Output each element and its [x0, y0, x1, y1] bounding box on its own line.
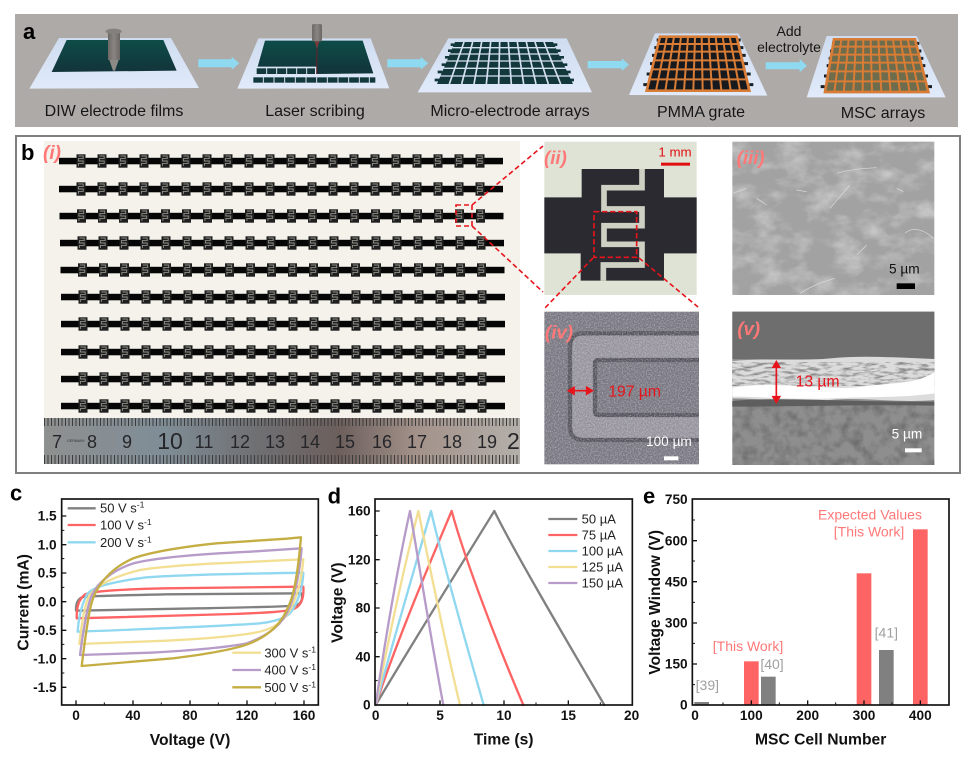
legend top: 50 V s — [100, 500, 137, 515]
arrow 4 — [766, 59, 807, 72]
y tick labels: 0.0 — [38, 594, 57, 609]
x tick labels — [691, 708, 932, 723]
dashed detail box — [594, 212, 637, 257]
x tick labels: 40 — [125, 708, 141, 723]
ruler: 11 — [195, 432, 213, 452]
y tick labels: 1.5 — [38, 509, 57, 524]
this work labels: Expected Values — [818, 506, 922, 522]
panel b: device images — [16, 136, 960, 473]
zoom lines from image ii to iv — [544, 258, 698, 309]
ruler: 19 — [477, 432, 497, 452]
label iii: (iii) — [737, 147, 765, 168]
x tick labels: 300 — [853, 708, 876, 723]
x tick labels: 100 — [740, 708, 763, 723]
step 4: PMMA grate illustration — [629, 33, 767, 96]
x tick labels: 0 — [72, 708, 80, 723]
label iv: (iv) — [545, 321, 573, 342]
x tick labels — [372, 708, 640, 723]
image iii: SEM surface — [732, 142, 934, 295]
ruler: 17 — [407, 432, 427, 452]
add electrolyte label: electrolyte — [757, 39, 821, 55]
thickness value: 13 µm — [796, 374, 839, 391]
y tick labels: -1.5 — [33, 680, 57, 695]
y tick labels: -0.5 — [33, 623, 57, 638]
y tick labels: -1.0 — [33, 651, 57, 666]
scale bar 100 µm: 100 µm — [646, 434, 692, 449]
legend top: -1 — [144, 517, 152, 527]
label v: (v) — [737, 318, 760, 339]
legend top: -1 — [144, 534, 152, 544]
ruler: 9 — [122, 432, 132, 452]
legend bottom: -1 — [308, 662, 316, 672]
legend bottom: 500 V s — [264, 680, 308, 695]
arrow 2 — [387, 57, 428, 70]
add electrolyte label: Add — [777, 23, 801, 39]
step captions: Micro-electrode arrays — [430, 103, 590, 120]
ruler: 2 — [507, 428, 520, 454]
bars — [694, 529, 928, 705]
curves — [76, 537, 303, 666]
legend — [548, 511, 623, 590]
step 2: laser scribing illustration — [237, 24, 389, 89]
ruler: GERMANY — [67, 439, 86, 443]
zoom indicator: dashed box and lines from image i to ii — [456, 146, 543, 292]
image ii: optical photo of a single device — [544, 142, 697, 295]
legend: 125 µA — [582, 559, 623, 574]
y tick labels: 80 — [355, 601, 371, 616]
this work labels: [This Work] — [713, 638, 783, 654]
y axis title: Voltage Window (V) — [647, 530, 664, 675]
step captions: Laser scribing — [265, 103, 365, 120]
image i: photo of the MSC array on paper — [43, 141, 520, 464]
x axis title: Time (s) — [474, 731, 534, 748]
panel letter e: e — [643, 483, 655, 508]
legend top: 100 V s — [100, 518, 144, 533]
panel c: CV curves chart — [10, 481, 318, 749]
ruler: 15 — [335, 432, 355, 452]
panel letter b: b — [21, 140, 34, 165]
y axis title: Voltage (V) — [329, 562, 346, 643]
axes box and ticks — [692, 499, 949, 705]
legend bottom: 300 V s — [264, 645, 308, 660]
scale bar 5 µm white — [892, 426, 922, 452]
ruler: 13 — [265, 432, 285, 452]
ruler: 12 — [230, 432, 250, 452]
reference labels — [696, 625, 898, 693]
this work labels: [This Work] — [834, 524, 904, 540]
curves — [376, 511, 604, 705]
x tick labels: 0 — [372, 708, 380, 723]
scale bar 5 µm white: 5 µm — [892, 426, 922, 441]
y tick labels: 40 — [355, 649, 371, 664]
x tick labels: 200 — [796, 708, 819, 723]
gap width arrow — [568, 387, 592, 394]
y tick labels: 0 — [680, 698, 688, 713]
y tick labels: 0 — [363, 698, 371, 713]
legend: 75 µA — [582, 527, 616, 542]
step captions: MSC arrays — [841, 105, 925, 122]
x tick labels: 400 — [909, 708, 932, 723]
step 3: micro-electrode array illustration — [418, 38, 592, 92]
ruler: 18 — [442, 432, 462, 452]
ruler: 14 — [300, 432, 320, 452]
legend: 50 µA — [582, 511, 616, 526]
x tick labels: 20 — [624, 708, 640, 723]
y tick labels — [348, 504, 371, 713]
image v: SEM cross-section — [732, 312, 934, 465]
ruler — [44, 418, 520, 464]
legend bottom: -1 — [308, 645, 316, 655]
scale bar 1 mm: 1 mm — [658, 145, 692, 160]
x axis title: Voltage (V) — [150, 732, 230, 749]
y tick labels — [33, 509, 57, 695]
panel letter d: d — [328, 483, 341, 508]
label ii: (ii) — [544, 147, 567, 168]
x tick labels: 0 — [691, 708, 699, 723]
scale bar 5 µm black: 5 µm — [889, 261, 920, 276]
ruler: 7 — [52, 432, 62, 452]
legend: 100 µA — [582, 543, 623, 558]
legend top: 200 V s — [100, 535, 144, 550]
ruler: 16 — [372, 432, 392, 452]
panel e: voltage window bar chart — [643, 483, 949, 748]
arrow 3 — [588, 58, 629, 71]
gap width value: 197 µm — [608, 384, 661, 401]
panel a: fabrication process — [15, 14, 958, 127]
y tick labels: 450 — [665, 574, 688, 589]
y axis title: Current (mA) — [15, 554, 32, 651]
scale bar 5 µm black — [889, 261, 920, 289]
legend bottom: 400 V s — [264, 663, 308, 678]
step captions: PMMA grate — [657, 104, 745, 121]
x tick labels: 15 — [561, 708, 576, 723]
y tick labels: 120 — [348, 552, 371, 567]
axes box and ticks — [375, 499, 632, 705]
y tick labels: 600 — [665, 533, 688, 548]
axes box and ticks — [62, 499, 318, 705]
step captions: DIW electrode films — [45, 103, 183, 120]
legend bottom: -1 — [308, 679, 316, 689]
label i: (i) — [43, 143, 61, 164]
legend: 150 µA — [582, 575, 623, 590]
x tick labels: 160 — [293, 708, 316, 723]
reference labels: [40] — [760, 656, 784, 672]
y tick labels: 300 — [665, 616, 688, 631]
step 1: DIW electrode film illustration — [29, 29, 199, 89]
x tick labels: 120 — [236, 708, 259, 723]
arrow 1 — [198, 57, 239, 70]
x axis title: MSC Cell Number — [755, 731, 886, 748]
y tick labels: 1.0 — [38, 537, 57, 552]
panel letter a: a — [23, 19, 36, 44]
x tick labels — [72, 708, 316, 723]
ruler: 8 — [87, 432, 97, 452]
this work labels — [713, 506, 922, 654]
ruler: 10 — [157, 428, 183, 454]
y tick labels: 160 — [348, 504, 371, 519]
panel letter c: c — [10, 481, 22, 506]
y tick labels: 0.5 — [38, 566, 57, 581]
legend bottom — [232, 645, 316, 695]
reference labels: [39] — [696, 677, 719, 693]
x tick labels: 10 — [496, 708, 512, 723]
x tick labels: 5 — [436, 708, 444, 723]
reference labels: [41] — [875, 625, 898, 641]
panel d: charge-discharge chart — [328, 483, 640, 748]
step 5: MSC array illustration — [807, 36, 946, 97]
scale bar 100 µm — [646, 434, 692, 460]
legend top: -1 — [137, 500, 145, 510]
thickness arrow — [773, 362, 780, 402]
x tick labels: 80 — [182, 708, 198, 723]
y tick labels: 750 — [665, 492, 688, 507]
image iv: microscope view of the gap — [544, 312, 699, 464]
y tick labels — [665, 492, 688, 713]
y tick labels: 150 — [665, 657, 688, 672]
legend top — [68, 500, 152, 550]
step captions — [45, 103, 925, 122]
